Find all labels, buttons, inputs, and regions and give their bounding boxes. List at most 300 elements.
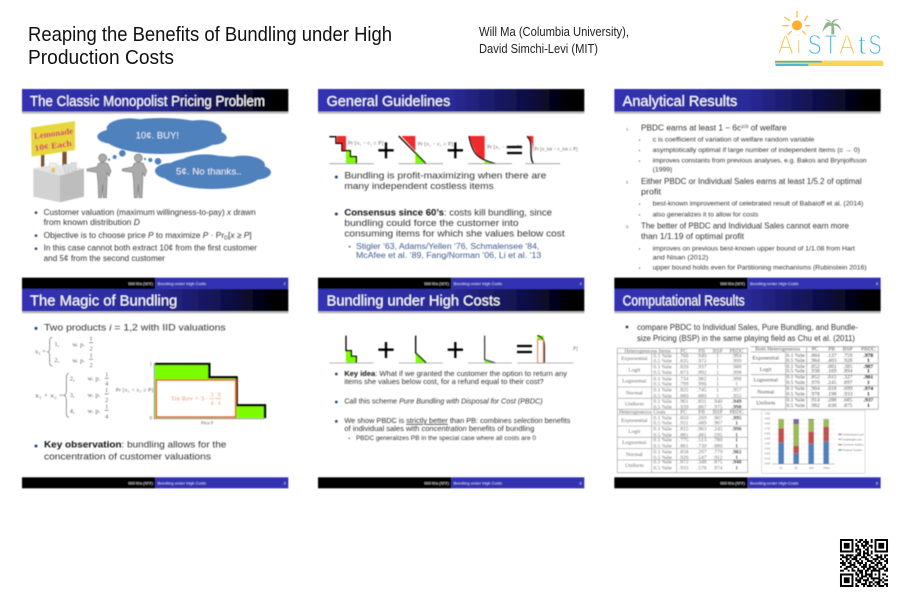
table: heterogeneous items and costs: 0.5 %ile xyxy=(654,421,672,427)
table: both heterogeneous: .938 xyxy=(810,369,820,375)
footer: 3 xyxy=(284,482,286,486)
formula: bundle valuation: w. p. xyxy=(88,376,101,383)
table: both heterogeneous: 1 xyxy=(867,380,870,386)
table: heterogeneous items and costs: .881 xyxy=(679,432,689,438)
heading: The Magic of Bundling xyxy=(30,293,177,309)
callout: 5 cents no thanks xyxy=(144,154,271,189)
chart: bundle demand curve: 1 xyxy=(150,363,153,368)
table: heterogeneous items and costs: Normal xyxy=(626,452,643,458)
table: heterogeneous items and costs: 1 xyxy=(735,438,738,444)
table: both heterogeneous: .974 xyxy=(864,386,873,392)
text block: result 1: improves constants from previous analyses, e.g. Bakos and Brynjolfsson xyxy=(653,158,867,165)
table: both heterogeneous: PB xyxy=(828,347,835,353)
formula: bundle valuation: 4 xyxy=(105,381,109,388)
footer xyxy=(614,278,881,289)
icon: AISTATS logo: S xyxy=(868,29,882,60)
table: heterogeneous items and costs: .799 xyxy=(679,382,689,388)
heading xyxy=(22,89,288,112)
text block: bullets xyxy=(335,369,571,442)
callout: 5 cents no thanks: 5¢. No thanks.. xyxy=(176,166,242,176)
table: heterogeneous items and costs: .933 xyxy=(679,465,689,471)
table: heterogeneous items and costs: 0.1 %ile xyxy=(654,399,672,405)
text block: key observation: concentration of customer valuations xyxy=(44,452,211,462)
table: heterogeneous items and costs: .063 xyxy=(697,426,707,432)
table: heterogeneous items and costs: 0.1 %ile xyxy=(654,365,672,371)
table: both heterogeneous: .385 xyxy=(843,364,853,370)
icon: equals xyxy=(507,147,522,153)
table: heterogeneous items and costs: 0.5 %ile xyxy=(654,404,672,410)
table: heterogeneous items and costs: .907 xyxy=(713,421,723,427)
table: heterogeneous items and costs: .949 xyxy=(732,399,742,405)
text block: result 1: of welfare xyxy=(748,124,787,133)
heading xyxy=(614,89,881,112)
table: heterogeneous items and costs: .835 xyxy=(679,359,689,365)
table: heterogeneous items and costs: 1 xyxy=(716,359,719,365)
text block: result 3: upper bound holds even for Partitioning mechanisms (Rubinstein 2016) xyxy=(653,265,867,272)
icon: plus xyxy=(448,142,463,158)
chart: bundle demand curve: Pr [x₁ + x₂ ≥ P] xyxy=(116,388,153,394)
table: both heterogeneous: Uniform xyxy=(756,400,776,407)
table: heterogeneous items and costs: 1 xyxy=(716,393,719,399)
text block: result 2: profit xyxy=(641,188,662,197)
table: both heterogeneous: .937 xyxy=(864,397,873,403)
formula: single item valuation: 2 xyxy=(89,345,93,352)
table: heterogeneous items and costs: .998 xyxy=(732,404,742,410)
formula: bundle valuation xyxy=(35,371,109,420)
table: both heterogeneous: .970 xyxy=(810,380,820,386)
text block: bullets: Key idea: What if we granted the customer the option to return any xyxy=(344,369,567,378)
footer xyxy=(318,477,584,488)
table: heterogeneous items and costs: 1 xyxy=(735,443,738,449)
chart: stacked bar welfare decomposition: Deadweight Loss xyxy=(843,438,862,441)
table: heterogeneous items and costs: Exponential xyxy=(621,356,648,362)
icon: lemonade stand: Lemonade xyxy=(33,127,74,141)
heading xyxy=(318,89,584,112)
text block: bullets: PBDC generalizes PB in the special case where all costs are 0 xyxy=(356,435,537,442)
table: heterogeneous items and costs: .269 xyxy=(697,415,707,421)
table: both heterogeneous: .169 xyxy=(827,369,837,375)
chart: stacked bar welfare decomposition: 0.700 xyxy=(764,429,771,431)
text block: bullets xyxy=(335,170,565,239)
table: heterogeneous items and costs: .867 xyxy=(697,404,707,410)
text block: citations: McAfee et al. ‘89, Fang/Norman ‘06, Li et al. ‘13 xyxy=(356,251,542,260)
authors: Will Ma (Columbia University), xyxy=(479,25,629,39)
text block: bullets: items she values below cost, for a refund equal to their cost? xyxy=(344,377,544,386)
chart: stacked bar welfare decomposition: 0.500 xyxy=(764,439,771,441)
chart: bundle demand curve: 4 xyxy=(218,401,221,407)
text block: bullets: many independent costless items xyxy=(344,181,494,191)
table: heterogeneous items and costs: .926 xyxy=(679,455,689,461)
chart: bundle demand curve: Tot Rev = 3 · xyxy=(171,396,208,403)
table: heterogeneous items and costs: 1 xyxy=(735,432,738,438)
table: heterogeneous items and costs: Uniform xyxy=(625,401,645,408)
table: heterogeneous items and costs: .994 xyxy=(732,353,742,359)
table: both heterogeneous: 1 xyxy=(867,358,870,364)
footer xyxy=(318,278,584,289)
formula: single item valuation: 1, xyxy=(54,341,60,348)
chart: bundle demand curve: = xyxy=(214,397,218,403)
table: heterogeneous items and costs: .996 xyxy=(697,382,707,388)
chart: PBDC item 3 xyxy=(468,336,512,363)
table: both heterogeneous: .978 xyxy=(864,353,873,359)
icon: second customer xyxy=(122,154,147,198)
heading: Analytical Results xyxy=(623,94,737,110)
table: heterogeneous items and costs: 1 xyxy=(716,388,719,394)
table: heterogeneous items and costs: 0.1 %ile xyxy=(654,415,672,421)
icon: QR code xyxy=(840,540,888,586)
table: heterogeneous items and costs: Logit xyxy=(628,429,641,435)
text block: result 1 xyxy=(626,124,867,174)
table: heterogeneous items and costs: .999 xyxy=(732,359,742,365)
text block: bullets: bundling could force the customer into xyxy=(344,218,519,228)
chart: PBDC bundle: P] xyxy=(573,346,578,352)
title xyxy=(28,24,392,69)
icon: AISTATS logo: A xyxy=(839,29,855,60)
chart: stacked bar welfare decomposition: PBDC xyxy=(824,468,830,470)
table: both heterogeneous: Exponential xyxy=(752,356,779,362)
table: both heterogeneous: .875 xyxy=(843,403,853,409)
footer: 2 xyxy=(284,282,286,286)
text block: result 3 xyxy=(626,221,867,272)
table: heterogeneous items and costs: .880 xyxy=(713,443,723,449)
table: heterogeneous items and costs: 0.5 %ile xyxy=(654,455,672,461)
table: both heterogeneous: .015 xyxy=(827,375,837,381)
table: both heterogeneous: PBDC xyxy=(861,347,876,353)
text block: two products: Two products i = 1,2 with IID valuations xyxy=(44,322,226,332)
table: heterogeneous items and costs: .948 xyxy=(732,460,742,466)
text block: result 2 xyxy=(626,177,863,218)
chart: stacked bar welfare decomposition: 0.100 xyxy=(764,459,771,461)
table: heterogeneous items and costs: .880 xyxy=(679,393,689,399)
table: heterogeneous items and costs: 0.5 %ile xyxy=(654,443,672,449)
text block: bullets: from known distribution D xyxy=(44,217,140,227)
table: heterogeneous items and costs: 0.1 %ile xyxy=(654,449,672,455)
footer: 5 xyxy=(876,282,878,286)
chart: item 3 demand xyxy=(468,136,522,164)
text block: result 1: PBDC earns at least 1 − 6c xyxy=(641,124,738,133)
table: heterogeneous items and costs: .245 xyxy=(713,426,723,432)
chart: PBDC bundle xyxy=(517,336,578,363)
text block: result 1: 2/3 xyxy=(741,124,749,130)
formula: single item valuation: 2 xyxy=(89,362,93,369)
formula: single item valuation: w. p. xyxy=(72,357,85,364)
panel: Analytical Results xyxy=(614,89,881,289)
authors xyxy=(479,25,629,56)
table: heterogeneous items and costs: .595 xyxy=(713,432,723,438)
table: heterogeneous items and costs: .940 xyxy=(713,399,723,405)
chart: bundle demand curve xyxy=(116,363,265,426)
icon: AISTATS logo: S xyxy=(808,29,822,60)
formula: bundle valuation: w. p. xyxy=(88,392,101,399)
table: heterogeneous items and costs: .734 xyxy=(679,376,689,382)
table: both heterogeneous: 0.5 %ile xyxy=(787,358,805,364)
formula: bundle valuation: 1 xyxy=(105,371,108,378)
table: heterogeneous items and costs: 0.5 %ile xyxy=(654,382,672,388)
table: heterogeneous items and costs: .975 xyxy=(713,404,723,410)
icon: AISTATS logo: A xyxy=(778,29,794,60)
table: heterogeneous items and costs: Normal xyxy=(626,390,643,396)
chart: bundle demand xyxy=(525,136,578,164)
text block: bullets: Consensus since 60’s: costs kill bundling, since xyxy=(344,208,552,218)
table: both heterogeneous: .897 xyxy=(843,380,853,386)
text block: compare: size Pricing (BSP) in the same playing field as Chu et al. (2011) xyxy=(637,334,855,343)
chart: stacked bar welfare decomposition: PC xyxy=(779,468,783,470)
table: heterogeneous items and costs: PC xyxy=(680,348,687,354)
table: both heterogeneous: PC xyxy=(812,347,819,353)
table: heterogeneous items and costs: .982 xyxy=(697,376,707,382)
heading: Computational Results xyxy=(623,293,745,309)
table: both heterogeneous: .018 xyxy=(827,386,837,392)
text block: bullets: In this case cannot both extract 10¢ from the first customer xyxy=(44,243,257,253)
text block: result 3: and Nisan (2012) xyxy=(653,254,708,261)
table: both heterogeneous: 0.5 %ile xyxy=(787,403,805,409)
footer: Bundling under High Costs xyxy=(750,482,798,486)
text block: bullets: We show PBDC is strictly better than PB: combines selection benefits xyxy=(344,416,571,425)
callout: 10 cents buy: 10¢. BUY! xyxy=(136,131,179,141)
formula: bundle valuation: 1 xyxy=(105,387,108,394)
table: heterogeneous items and costs: .957 xyxy=(732,388,742,394)
chart: bundle demand: Pr [x_tot − c_tot ≥ P] xyxy=(534,147,578,153)
table: both heterogeneous: .137 xyxy=(827,353,837,359)
table: heterogeneous items and costs: .297 xyxy=(697,449,707,455)
heading xyxy=(614,289,881,313)
table: heterogeneous items and costs: .826 xyxy=(679,365,689,371)
chart: stacked bar welfare decomposition: 0.200 xyxy=(764,454,771,456)
table: heterogeneous items and costs: .745 xyxy=(697,388,707,394)
chart: stacked bar welfare decomposition: 0.900 xyxy=(764,419,771,421)
text block: citations: Stigler ‘63, Adams/Yellen ‘76, Schmalensee ‘84, xyxy=(356,242,539,251)
chart: item 3 demand: Pr [x₁ − c₁ ≥ P] xyxy=(487,145,522,151)
table: heterogeneous items and costs: .489 xyxy=(697,421,707,427)
table: heterogeneous items and costs: 0.5 %ile xyxy=(654,359,672,365)
footer: 6 xyxy=(876,482,878,486)
formula: bundle valuation: 4, xyxy=(70,408,75,415)
table: heterogeneous items and costs: 1 xyxy=(716,382,719,388)
table: both heterogeneous: 0.1 %ile xyxy=(787,386,805,392)
table: both heterogeneous: .933 xyxy=(843,392,853,398)
text block: result 2: also generalizes it to allow for costs xyxy=(653,211,759,218)
formula: single item valuation: w. p. xyxy=(72,341,85,348)
text block: result 3: than 1/1.19 of optimal profit xyxy=(641,232,745,241)
title: Production Costs xyxy=(28,47,174,69)
text block: bullets: and 5¢ from the second customer xyxy=(44,253,165,263)
table: heterogeneous items and costs: .940 xyxy=(697,353,707,359)
table: both heterogeneous: .403 xyxy=(827,358,837,364)
text block: compare xyxy=(626,323,858,343)
table: heterogeneous items and costs: Uniform xyxy=(625,462,645,469)
icon: AISTATS logo: T xyxy=(824,29,837,60)
table: both heterogeneous: .894 xyxy=(843,369,853,375)
table: heterogeneous items and costs: .766 xyxy=(679,353,689,359)
formula: single item valuation: 1 xyxy=(89,352,93,359)
chart: item 1 demand xyxy=(329,136,384,164)
table: heterogeneous items and costs: .513 xyxy=(697,438,707,444)
footer xyxy=(614,477,881,488)
formula: bundle valuation: 1 xyxy=(105,403,108,410)
table: both heterogeneous: Logit xyxy=(760,367,772,373)
table: heterogeneous items and costs: .998 xyxy=(732,370,742,376)
table: heterogeneous items and costs: PB xyxy=(698,348,705,354)
table: heterogeneous items and costs: .974 xyxy=(713,465,723,471)
footer: Will Ma (MIT) xyxy=(424,282,449,286)
table: heterogeneous items and costs: .775 xyxy=(679,438,689,444)
table: heterogeneous items and costs: PBDC xyxy=(729,348,744,354)
table: heterogeneous items and costs: .998 xyxy=(732,376,742,382)
table: heterogeneous items and costs: .850 xyxy=(679,415,689,421)
table: both heterogeneous: Lognormal xyxy=(753,378,778,384)
table: heterogeneous items and costs: 0.1 %ile xyxy=(654,460,672,466)
table: both heterogeneous: .638 xyxy=(827,403,837,409)
callout: 10 cents buy xyxy=(97,118,227,161)
table: heterogeneous items and costs: .578 xyxy=(697,465,707,471)
table: heterogeneous items and costs: 0.5 %ile xyxy=(654,465,672,471)
table: both heterogeneous: 0.5 %ile xyxy=(787,369,805,375)
chart: stacked bar welfare decomposition: 0.000 xyxy=(764,464,771,466)
formula: bundle valuation: w. p. xyxy=(88,408,101,415)
chart: bundle demand curve: 4 xyxy=(210,401,213,407)
table: heterogeneous items and costs: Lognormal xyxy=(622,440,647,446)
chart: stacked bar welfare decomposition: 0.300 xyxy=(764,449,771,451)
table: heterogeneous items and costs: .348 xyxy=(697,460,707,466)
text block: result 1: c is coefficient of variation of welfare random variable xyxy=(653,137,815,144)
icon: lemonade stand xyxy=(31,121,84,202)
icon: AISTATS logo: i xyxy=(796,29,801,60)
table: both heterogeneous: 0.1 %ile xyxy=(787,397,805,403)
table: heterogeneous items and costs: 1 xyxy=(716,353,719,359)
text block: bullets: Customer valuation (maximum willingness-to-pay) x drawn xyxy=(44,207,256,217)
table: heterogeneous items and costs: 0.1 %ile xyxy=(654,388,672,394)
heading xyxy=(318,289,584,311)
table: heterogeneous items and costs: .872 xyxy=(679,460,689,466)
chart: item 1 demand: Pr [x₁ − c₁ ≥ P] xyxy=(348,141,384,147)
table: both heterogeneous: .699 xyxy=(843,386,853,392)
chart: item 2 demand xyxy=(399,136,453,164)
text block: bullets: x ≥ P] xyxy=(230,230,252,240)
table: heterogeneous items and costs: .481 xyxy=(697,432,707,438)
text block: key observation xyxy=(34,439,226,462)
table: heterogeneous items and costs: Exponential xyxy=(621,418,648,424)
table: both heterogeneous: .964 xyxy=(810,358,820,364)
table: heterogeneous items and costs: .779 xyxy=(713,449,723,455)
table: both heterogeneous: .288 xyxy=(827,397,837,403)
table: heterogeneous items and costs: 0.1 %ile xyxy=(654,376,672,382)
footer: Will Ma (MIT) xyxy=(424,482,449,486)
table: heterogeneous items and costs: 1 xyxy=(716,376,719,382)
text block: compare: compare PBDC to Individual Sales, Pure Bundling, and Bundle- xyxy=(637,323,858,332)
table: both heterogeneous: .759 xyxy=(843,353,853,359)
icon: first customer xyxy=(87,154,111,198)
table: heterogeneous items and costs: 0.1 %ile xyxy=(654,426,672,432)
table: heterogeneous items and costs: .825 xyxy=(679,388,689,394)
table: heterogeneous items and costs: .780 xyxy=(713,438,723,444)
text block: key observation: Key observation: bundling allows for the xyxy=(44,439,226,449)
table: both heterogeneous: .852 xyxy=(810,364,820,370)
footer: Bundling under High Costs xyxy=(158,282,206,286)
formula: single item valuation: 2, xyxy=(54,357,60,364)
heading: The Classic Monopolist Pricing Problem xyxy=(30,94,265,110)
icon: equals xyxy=(517,346,532,352)
table: both heterogeneous: .245 xyxy=(827,380,837,386)
table: heterogeneous items and costs: .861 xyxy=(679,443,689,449)
table: heterogeneous items and costs: 1 xyxy=(716,370,719,376)
table: heterogeneous items and costs: .831 xyxy=(697,399,707,405)
table: heterogeneous items and costs: PBDC xyxy=(729,410,744,416)
table: heterogeneous items and costs: .912 xyxy=(713,455,723,461)
table: heterogeneous items and costs: .815 xyxy=(679,426,689,432)
footer: Will Ma (MIT) xyxy=(720,282,745,286)
table: both heterogeneous: .884 xyxy=(810,353,820,359)
icon: plus xyxy=(378,142,394,158)
table: both heterogeneous: .685 xyxy=(843,397,853,403)
table: heterogeneous items and costs: BSP xyxy=(713,348,723,354)
table: heterogeneous items and costs: 0.1 %ile xyxy=(654,353,672,359)
text block: result 3: The better of PBDC and Individual Sales cannot earn more xyxy=(641,221,850,230)
text block: bullets: Objective is to choose price P to maximize P · Pr xyxy=(44,230,224,240)
table: heterogeneous items and costs: 1 xyxy=(735,455,738,461)
table: heterogeneous items and costs: PB xyxy=(698,410,705,416)
table: both heterogeneous: .198 xyxy=(827,392,837,398)
chart: stacked bar welfare decomposition: 0.600 xyxy=(764,434,771,436)
table: heterogeneous items and costs: Heterogeneous Costs xyxy=(619,410,666,416)
text block: result 2: 2. xyxy=(626,181,629,185)
table: both heterogeneous: 0.5 %ile xyxy=(787,392,805,398)
title: Reaping the Benefits of Bundling under High xyxy=(28,24,392,46)
footer: Bundling under High Costs xyxy=(158,482,206,486)
chart: bundle demand curve: 0 xyxy=(150,416,153,421)
table: both heterogeneous: 0.5 %ile xyxy=(787,380,805,386)
formula: bundle valuation: 4 xyxy=(105,413,109,420)
table: heterogeneous items and costs: .972 xyxy=(697,359,707,365)
table: both heterogeneous: .987 xyxy=(864,364,873,370)
panel: Bundling under High Costs xyxy=(318,289,584,488)
table: heterogeneous items and costs: .873 xyxy=(679,370,689,376)
table: both heterogeneous: 1 xyxy=(867,392,870,398)
table: heterogeneous items and costs: .937 xyxy=(697,365,707,371)
chart: bundle demand curve: 3 xyxy=(210,392,213,398)
footer: Will Ma (MIT) xyxy=(720,482,745,486)
table: heterogeneous items and costs: 0.5 %ile xyxy=(654,432,672,438)
chart: stacked bar welfare decomposition: 1.000 xyxy=(764,414,771,416)
table: heterogeneous items and costs: 1 xyxy=(735,382,738,388)
table: heterogeneous items and costs: 1 xyxy=(716,365,719,371)
panel: Computational Results xyxy=(614,289,881,488)
table: heterogeneous items and costs: .992 xyxy=(697,370,707,376)
table: heterogeneous items and costs: .880 xyxy=(697,393,707,399)
heading: General Guidelines xyxy=(327,94,450,110)
text block: bullets: [ xyxy=(228,230,231,240)
chart: item 2 demand: Pr [x₁ − c₁ ≥ P] xyxy=(418,141,453,147)
footer xyxy=(22,477,288,488)
table: heterogeneous items and costs xyxy=(617,348,748,473)
authors: David Simchi-Levi (MIT) xyxy=(479,42,598,56)
formula: bundle valuation: 2 xyxy=(105,397,108,404)
text block: bullets: of individual sales with concentration benefits of bundling xyxy=(344,424,534,433)
footer: 6 xyxy=(580,482,582,486)
chart: stacked bar welfare decomposition: PB xyxy=(794,468,798,470)
text block: bullets: Call this scheme Pure Bundling with Disposal for Cost (PBDC) xyxy=(344,396,543,405)
formula: bundle valuation: x₁ + x₂ = xyxy=(35,392,64,399)
text block: result 1: 1. xyxy=(626,127,629,131)
chart: stacked bar welfare decomposition: Consumer Surplus xyxy=(843,444,864,447)
table: heterogeneous items and costs: .547 xyxy=(697,455,707,461)
table: heterogeneous items and costs: .982 xyxy=(732,449,742,455)
text block: result 3: improves on previous best-known upper bound of 1/1.08 from Hart xyxy=(653,245,855,252)
table: heterogeneous items and costs: 0.5 %ile xyxy=(654,393,672,399)
table: both heterogeneous: 1 xyxy=(867,403,870,409)
chart: bundle demand curve: Price P xyxy=(201,420,213,426)
table: heterogeneous items and costs: Logit xyxy=(628,367,641,373)
table: both heterogeneous: 0.1 %ile xyxy=(787,375,805,381)
